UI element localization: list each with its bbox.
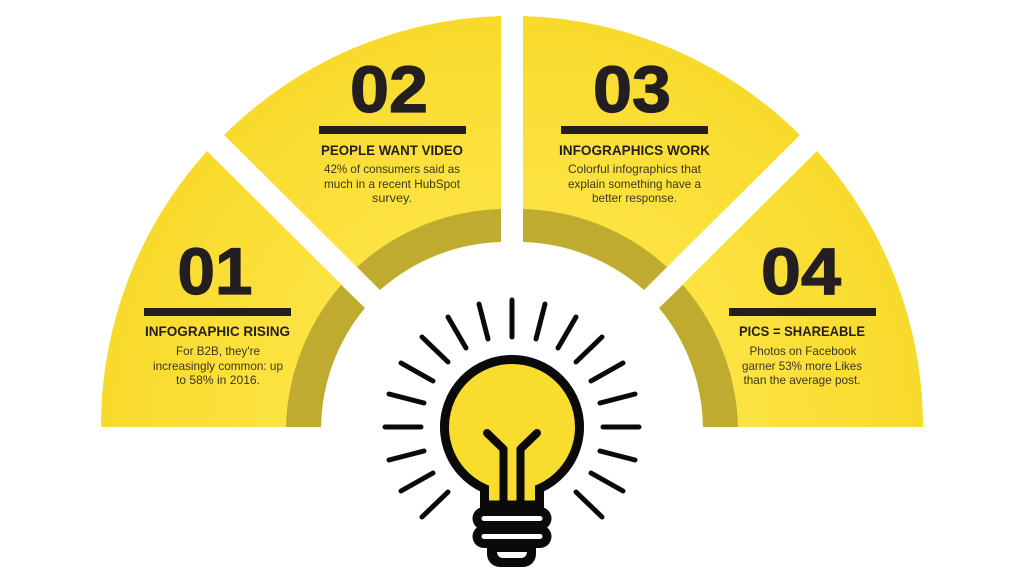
body 02: much in a recent HubSpot [324, 177, 461, 191]
band 02 [357, 209, 501, 290]
bulb glass [445, 359, 580, 505]
body 02: survey. [372, 191, 412, 205]
rule 02 [319, 126, 466, 134]
segment 03 yellow [523, 16, 800, 290]
band 04 [659, 285, 738, 427]
band 03 [523, 209, 667, 290]
body 03: explain something have a [568, 177, 701, 191]
segment 02 yellow [224, 16, 501, 290]
light rays [385, 300, 639, 517]
segment 04 yellow [659, 151, 923, 427]
panel: 01 infographic rising [101, 151, 365, 427]
heading 02: PEOPLE WANT VIDEO [321, 142, 463, 158]
body 01: to 58% in 2016. [176, 373, 260, 387]
body 03 [568, 162, 702, 205]
number 04: 04 [761, 234, 841, 308]
icon: light bulb [385, 300, 639, 567]
body 03: Colorful infographics that [568, 162, 702, 176]
body 03: better response. [592, 191, 677, 205]
body 04: Photos on Facebook [750, 344, 857, 358]
body 01 [153, 344, 283, 387]
rule 03 [561, 126, 708, 134]
number 01: 01 [178, 234, 252, 308]
number 03: 03 [593, 52, 671, 126]
number 02: 02 [350, 52, 428, 126]
filament [487, 433, 537, 505]
body 04 [742, 344, 862, 387]
heading 03: INFOGRAPHICS WORK [559, 142, 710, 158]
band 01 [286, 285, 365, 427]
heading 01: INFOGRAPHIC RISING [145, 323, 290, 339]
body 02 [324, 162, 461, 205]
rule 01 [144, 308, 291, 316]
panel: 03 infographics work [523, 16, 800, 290]
body 01: For B2B, they're [176, 344, 260, 358]
body 04: than the average post. [744, 373, 860, 387]
segment 01 yellow [101, 151, 365, 427]
panel: 04 pics = shareable [659, 151, 923, 427]
heading 04: PICS = SHAREABLE [739, 323, 865, 339]
body 02: 42% of consumers said as [324, 162, 460, 176]
panel: 02 people want video [224, 16, 501, 290]
rule 04 [729, 308, 876, 316]
body 01: increasingly common: up [153, 359, 283, 373]
body 04: garner 53% more Likes [742, 359, 862, 373]
screw base [472, 503, 552, 567]
